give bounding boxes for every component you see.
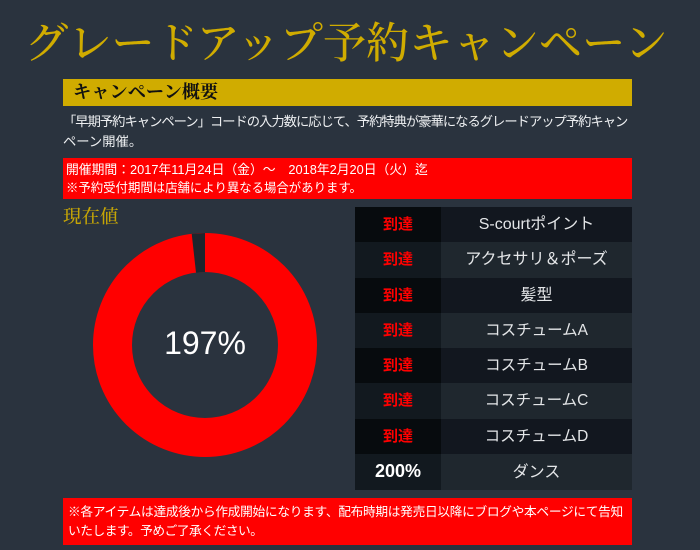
row: costume B: コスチュームB (485, 357, 588, 374)
chart gap segment (192, 233, 205, 273)
text block: overview description: ペーン開催。 (63, 134, 142, 148)
row: hairstyle: 到達 (383, 287, 413, 304)
row: accessories and poses: アクセサリ＆ポーズ (465, 251, 608, 268)
callout: distribution note (63, 498, 632, 545)
row: accessories and poses: 到達 (383, 251, 413, 268)
text block: overview description: 「早期予約キャンペーン」コードの入力数に応じて、予約特典が豪華になるグレードアップ予約キャン (63, 114, 627, 129)
row: S-court point: S-courtポイント (479, 216, 594, 233)
row: costume C: コスチュームC (485, 392, 588, 409)
row: dance: 200% (375, 461, 421, 481)
row: costume A (355, 313, 632, 348)
callout: campaign period: 開催期間：2017年11月24日（金）～ 2018年2月20日（火）迄 (66, 162, 428, 177)
donut chart: 197% (93, 233, 317, 457)
row: dance: ダンス (513, 464, 560, 481)
callout: campaign period (63, 158, 632, 199)
row: costume A: コスチュームA (485, 322, 588, 339)
title: グレードアップ予約キャンペーン (25, 21, 668, 68)
row: accessories and poses (355, 242, 632, 278)
row: hairstyle: 髪型 (520, 287, 552, 304)
row: S-court point: 到達 (383, 216, 413, 233)
callout: distribution note: いたします。予めご了承ください。 (68, 524, 263, 538)
chart value: 197% (164, 325, 246, 361)
row: costume B (355, 348, 632, 383)
row: S-court point (355, 207, 632, 242)
row: costume C (355, 383, 632, 419)
heading: current value: 現在値 (63, 208, 119, 228)
callout: distribution note: ※各アイテムは達成後から作成開始になります、配布時期は発売日以降にブログや本ページにて告知 (68, 505, 623, 519)
row: hairstyle (355, 278, 632, 313)
row: dance (355, 454, 632, 490)
callout: campaign period: ※予約受付期間は店舗により異なる場合があります。 (66, 181, 362, 195)
row: costume B: 到達 (383, 357, 413, 374)
row: costume D: 到達 (383, 428, 413, 445)
heading: campaign overview (63, 79, 632, 106)
text block: overview description (63, 114, 628, 148)
row: costume D: コスチュームD (485, 428, 588, 445)
heading: campaign overview: キャンペーン概要 (73, 82, 218, 102)
row: costume C: 到達 (383, 392, 413, 409)
row: costume A: 到達 (383, 322, 413, 339)
row: costume D (355, 419, 632, 454)
